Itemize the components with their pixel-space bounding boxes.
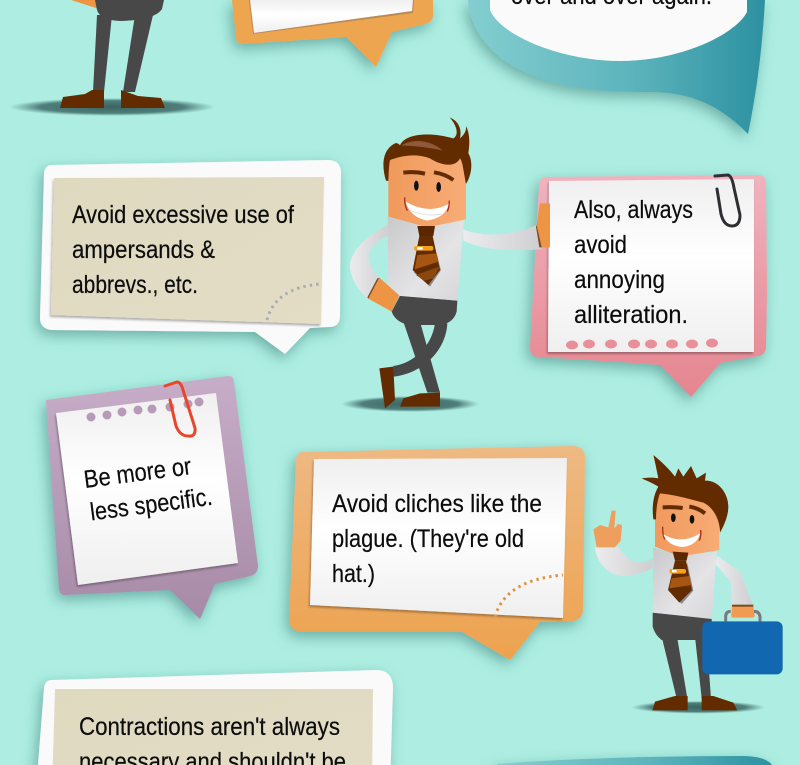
text: specific tip: less specific. [88,483,214,526]
speech bubble: alliteration [530,175,767,397]
text: cliches tip [332,490,542,588]
speech bubble: be specific [46,376,258,619]
icon: red paperclip [165,382,195,436]
character: man with briefcase [593,455,783,714]
speech bubble: contractions [36,670,393,765]
character: man leaning [341,117,550,412]
paper note: beige [52,689,373,765]
text: specific tip: Be more or [82,452,193,494]
text: cliches tip: hat.) [332,560,375,588]
text: alliteration tip: avoid [574,231,627,259]
paper note: beige [51,177,324,324]
speech bubble: ampersands [40,160,341,354]
text: alliteration tip: alliteration. [574,301,688,329]
icon: blue briefcase [702,621,783,674]
text: ampersands tip: ampersands & [72,236,215,264]
speech bubble: cliches [289,446,585,660]
speech bubble: teal top [468,0,765,134]
character: man at top left (legs only) [9,0,215,116]
dotted arc [495,575,563,617]
icon: black paperclip [715,175,740,226]
text: alliteration tip: Also, always [574,196,693,224]
punched holes [86,398,204,422]
punched holes [566,338,718,350]
shoes [379,367,395,408]
text: contractions tip [79,713,346,765]
text: contractions tip: Contractions aren't always [79,713,340,741]
paper note: white [310,458,567,618]
speech bubble: orange top [232,0,433,67]
text: ampersands tip: abbrevs., etc. [72,271,198,299]
text: ampersands tip [72,201,294,299]
text: ampersands tip: Avoid excessive use of [72,201,294,229]
text: alliteration tip [574,196,693,329]
paper note: torn white [548,179,754,352]
text: cliches tip: plague. (They're old [332,525,524,553]
speech bubble: teal bottom [497,756,774,765]
paper note: tilted [56,393,238,585]
text: cliches tip: Avoid cliches like the [332,490,542,518]
dotted arc [267,284,320,320]
text: specific tip [82,450,214,527]
text: alliteration tip: annoying [574,266,665,294]
